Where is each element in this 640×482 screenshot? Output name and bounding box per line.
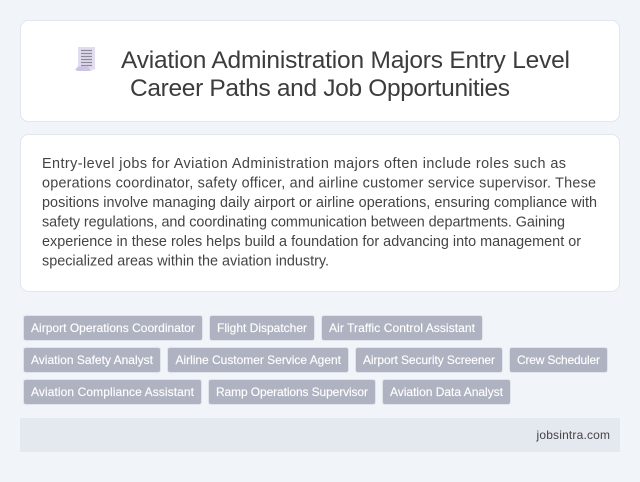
tag: Aviation Compliance Assistant: Aviation Compliance Assistant <box>31 385 195 399</box>
text block: description <box>42 156 597 270</box>
text block: description: Entry-level jobs for Aviation Administration majors often include roles such as <box>42 156 566 172</box>
text block: description: operations coordinator, safety officer, and airline customer service supervisor. These <box>42 176 596 192</box>
tag: Aviation Compliance Assistant <box>24 380 202 404</box>
tag: Airline Customer Service Agent <box>168 348 348 372</box>
title: Aviation Administration Majors Entry Level <box>121 47 570 74</box>
tag: Aviation Data Analyst: Aviation Data Analyst <box>390 385 504 399</box>
tag: Crew Scheduler: Crew Scheduler <box>517 353 600 367</box>
tag list <box>24 316 608 404</box>
tag: Aviation Safety Analyst <box>24 348 160 372</box>
tag: Airline Customer Service Agent: Airline Customer Service Agent <box>176 353 342 367</box>
tag: Airport Operations Coordinator <box>24 316 202 340</box>
tag: Airport Security Screener: Airport Security Screener <box>363 353 495 367</box>
text block: description: safety regulations, and coordinating communication between departments. Gaining <box>42 214 565 230</box>
tag: Airport Security Screener <box>356 348 502 372</box>
panel: title card <box>20 20 620 122</box>
title: Career Paths and Job Opportunities <box>130 75 510 102</box>
tag: Ramp Operations Supervisor <box>208 380 376 404</box>
footer: jobsintra.com <box>536 428 610 442</box>
tag: Aviation Data Analyst <box>382 380 510 404</box>
tag: Air Traffic Control Assistant: Air Traffic Control Assistant <box>329 321 476 335</box>
tag: Flight Dispatcher <box>210 316 314 340</box>
text block: description: experience in these roles helps build a foundation for advancing into management or <box>42 234 581 250</box>
tag: Crew Scheduler <box>510 348 608 372</box>
text block: description: positions involve managing daily airport or airline operations, ensuring compliance with <box>42 195 597 211</box>
tag: Ramp Operations Supervisor: Ramp Operations Supervisor <box>216 385 368 399</box>
title <box>121 47 570 102</box>
tag: Airport Operations Coordinator: Airport Operations Coordinator <box>31 321 195 335</box>
footer <box>20 418 620 452</box>
tag: Aviation Safety Analyst: Aviation Safety Analyst <box>31 353 154 367</box>
icon: document <box>75 47 95 71</box>
panel: description <box>20 134 620 292</box>
tag: Air Traffic Control Assistant <box>322 316 482 340</box>
text block: description: specialized areas within the aviation industry. <box>42 254 329 270</box>
tag: Flight Dispatcher: Flight Dispatcher <box>217 321 307 335</box>
